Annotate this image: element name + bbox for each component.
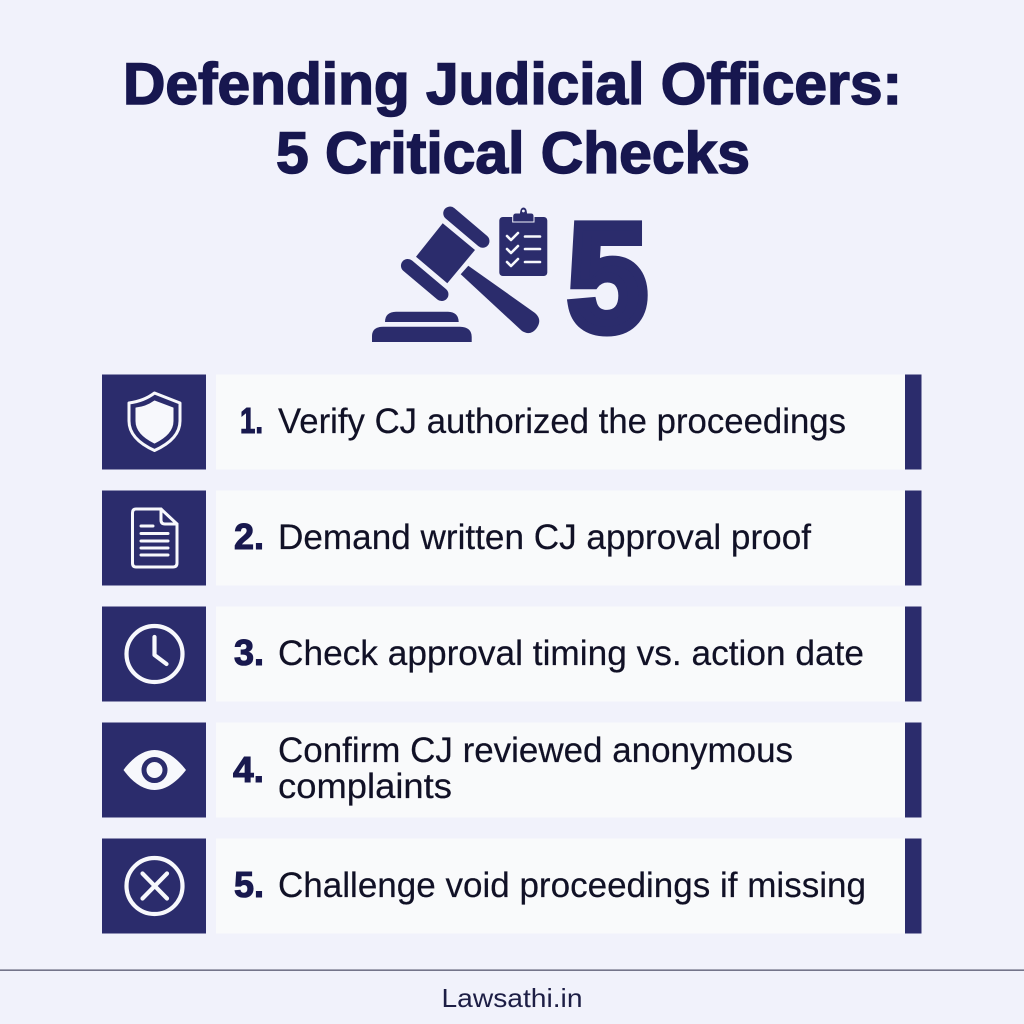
panel: row 5 background — [216, 838, 905, 934]
check row 4 — [102, 722, 922, 818]
icon box: document — [102, 490, 206, 586]
text 4: Confirm CJ reviewed anonymous — [278, 731, 793, 770]
panel: row 1 background — [216, 374, 905, 470]
accent bar 3 — [905, 606, 922, 702]
accent bar 2 — [905, 490, 922, 586]
icon box: eye — [102, 722, 206, 818]
panel: row 2 background — [216, 490, 905, 586]
number 4: 4. — [233, 749, 264, 790]
icon box: cross circle — [102, 838, 206, 934]
icon: gavel — [372, 213, 539, 342]
check row 2 — [102, 490, 922, 586]
check row 3 — [102, 606, 922, 702]
icon: clipboard — [499, 207, 547, 276]
text 2: Demand written CJ approval proof — [278, 518, 811, 557]
panel: row 4 background — [216, 722, 905, 818]
icon box: clock — [102, 606, 206, 702]
title — [123, 52, 902, 186]
number 3: 3. — [234, 632, 264, 673]
accent bar 5 — [905, 838, 922, 934]
number 2: 2. — [234, 516, 264, 557]
accent bar 4 — [905, 722, 922, 818]
accent bar 1 — [905, 374, 922, 470]
number 5: 5. — [234, 864, 264, 905]
footer text: Lawsathi.in — [442, 983, 582, 1013]
big number 5: 5 — [568, 193, 647, 363]
text 1: Verify CJ authorized the proceedings — [278, 402, 846, 441]
text 5: Challenge void proceedings if missing — [278, 866, 866, 905]
check row 5 — [102, 838, 922, 934]
number 1: 1. — [240, 400, 263, 441]
text 4: complaints — [278, 767, 452, 806]
icon box: shield — [102, 374, 206, 470]
hero illustration — [372, 193, 647, 363]
title: Defending Judicial Officers: — [123, 52, 902, 117]
text 3: Check approval timing vs. action date — [278, 634, 864, 673]
panel: row 3 background — [216, 606, 905, 702]
title: 5 Critical Checks — [276, 121, 750, 186]
check row 1 — [102, 374, 922, 470]
